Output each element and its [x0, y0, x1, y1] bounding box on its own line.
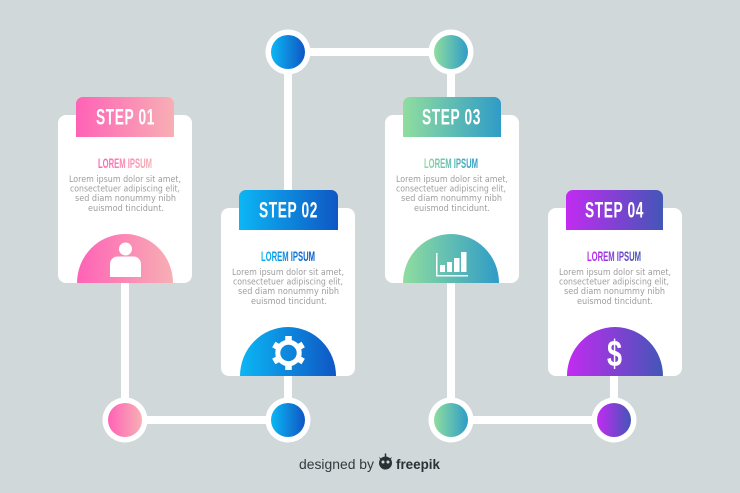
body text: sed diam nonummy nibh [238, 287, 339, 297]
body text: consectetuer adipiscing elit, [396, 185, 506, 195]
heading: LOREM IPSUM [424, 155, 478, 171]
node: step 03 bottom [428, 398, 474, 442]
semicircle [403, 234, 499, 283]
body text: consectetuer adipiscing elit, [559, 278, 669, 288]
step title: STEP 03 [422, 104, 481, 130]
card [548, 208, 682, 376]
heading: LOREM IPSUM [261, 248, 315, 264]
node: step 04 bottom [592, 398, 636, 442]
card [58, 115, 192, 283]
body text: sed diam nonummy nibh [75, 194, 176, 204]
footer credit: designed by [299, 457, 374, 472]
step title: STEP 02 [259, 198, 318, 222]
panel: step 03 [385, 97, 519, 283]
icon: person [110, 242, 141, 277]
body text: euismod tincidunt. [577, 297, 653, 307]
footer credit: freepik [396, 456, 440, 472]
panel: step 04 [548, 190, 682, 376]
body text [232, 268, 344, 307]
body text: Lorem ipsum dolor sit amet, [69, 175, 181, 185]
footer credit [299, 454, 440, 472]
heading: LOREM IPSUM [587, 248, 641, 264]
icon: bar chart [436, 252, 468, 276]
card [385, 115, 519, 283]
semicircle [77, 234, 173, 283]
icon: dollar sign: $ [607, 333, 622, 374]
semicircle [567, 327, 663, 376]
step title: STEP 01 [96, 104, 155, 130]
node: top left [266, 30, 310, 74]
card [221, 208, 355, 376]
node: top right [428, 30, 474, 74]
body text: Lorem ipsum dolor sit amet, [232, 268, 344, 278]
tab [566, 190, 663, 230]
icon: freepik logo [379, 454, 392, 470]
body text: consectetuer adipiscing elit, [70, 185, 180, 195]
body text: Lorem ipsum dolor sit amet, [396, 175, 508, 185]
connector path [125, 52, 614, 420]
body text: consectetuer adipiscing elit, [233, 278, 343, 288]
body text: euismod tincidunt. [88, 204, 164, 214]
step title: STEP 04 [585, 198, 644, 222]
body text [559, 268, 671, 307]
body text: euismod tincidunt. [414, 204, 490, 214]
body text: Lorem ipsum dolor sit amet, [559, 268, 671, 278]
body text: sed diam nonummy nibh [564, 287, 665, 297]
panel: step 01 [58, 97, 192, 283]
semicircle [240, 327, 336, 376]
body text [396, 175, 508, 214]
panel: step 02 [221, 190, 355, 376]
node: step 02 bottom [266, 398, 310, 442]
body text [69, 175, 181, 214]
tab [76, 97, 174, 137]
body text: euismod tincidunt. [251, 297, 327, 307]
node: step 01 bottom [102, 398, 148, 442]
tab [403, 97, 501, 137]
body text: sed diam nonummy nibh [401, 194, 502, 204]
tab [239, 190, 338, 230]
icon: gear [274, 336, 303, 370]
heading: LOREM IPSUM [98, 155, 152, 171]
